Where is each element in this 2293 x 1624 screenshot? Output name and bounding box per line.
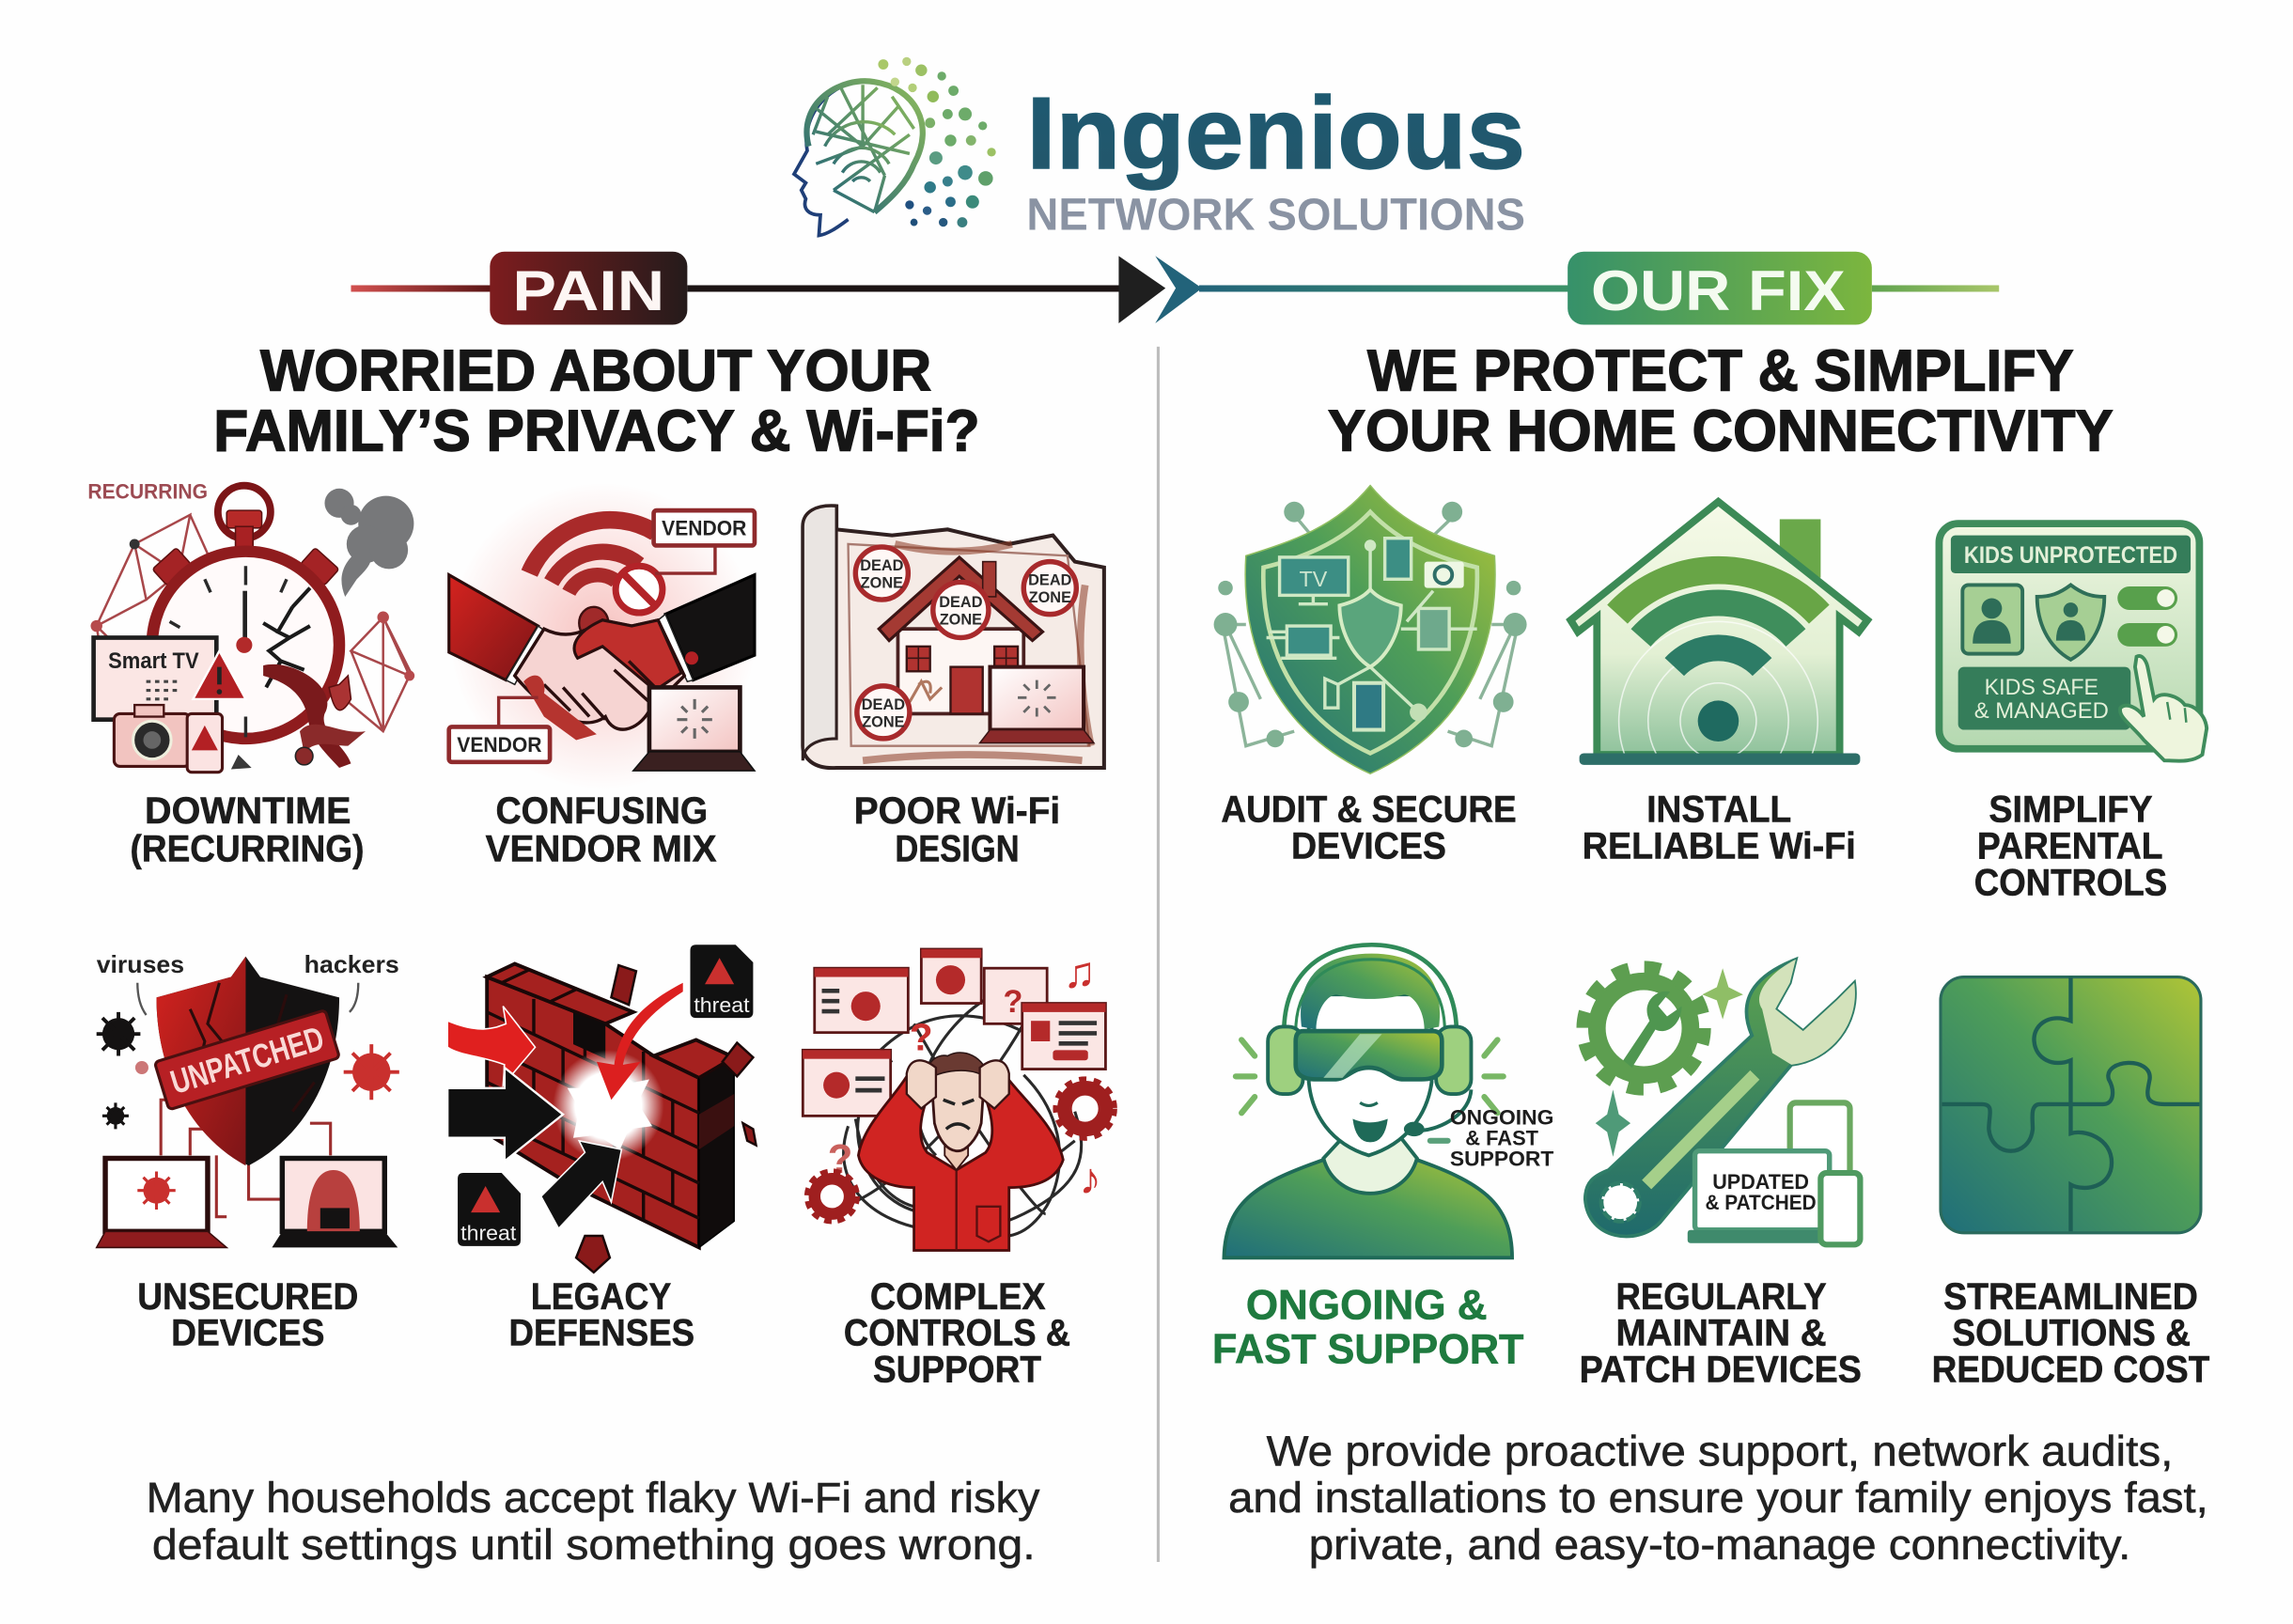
- icon: overwhelmed man with windows: ♫: [1063, 947, 1096, 996]
- label: poor wi-fi design: DESIGN: [895, 829, 1020, 870]
- icon: handshake with vendors: [449, 483, 757, 789]
- fix summary text: and installations to ensure your family enjoys fast,: [1228, 1474, 2208, 1522]
- icon: house with wifi: [1570, 502, 1867, 820]
- item: ongoing and fast support: [1212, 945, 1554, 1372]
- heading: fix: YOUR HOME CONNECTIVITY: [1328, 398, 2114, 463]
- icon: shield with devices: [1214, 486, 1527, 773]
- logo: [794, 57, 1525, 240]
- label: poor wi-fi design: [854, 790, 1060, 870]
- icon: threat tag top: [690, 945, 753, 1018]
- pain badge: [490, 252, 687, 324]
- heading: pain: FAMILY’S PRIVACY & Wi-Fi?: [213, 398, 980, 463]
- pain badge: PAIN: [512, 258, 664, 322]
- icon: parental control panel with hand: KIDS UNPROTECTED: [1964, 542, 2177, 569]
- label: legacy defenses: LEGACY: [531, 1276, 671, 1318]
- pain summary text: default settings until something goes wrong.: [152, 1521, 1036, 1569]
- label: streamlined solutions and reduced cost: STREAMLINED: [1943, 1276, 2198, 1318]
- panel: fix items: [1212, 486, 2209, 1569]
- label: audit and secure devices: [1221, 789, 1517, 867]
- label: confusing vendor mix: VENDOR MIX: [486, 829, 717, 870]
- label: unsecured devices: UNSECURED: [137, 1276, 358, 1318]
- pain summary text: Many households accept flaky Wi-Fi and risky: [147, 1474, 1040, 1522]
- icon: burnt floor plan with dead zones: ZONE: [1029, 589, 1071, 606]
- label: regularly maintain and patch devices: MAINTAIN &: [1616, 1313, 1827, 1354]
- icon: support agent with headset and goggles: ONGOING: [1450, 1106, 1553, 1130]
- label: downtime: DOWNTIME: [145, 790, 351, 832]
- logo subtitle: NETWORK SOLUTIONS: [1026, 189, 1525, 240]
- label: audit and secure devices: AUDIT & SECURE: [1221, 789, 1517, 831]
- logo icon: head with network brain: [794, 57, 996, 236]
- heading: pain: WORRIED ABOUT YOUR: [260, 339, 931, 404]
- fix summary text: We provide proactive support, network audits,: [1267, 1427, 2173, 1475]
- pain summary text: [147, 1474, 1040, 1569]
- icon: threat tag top: threat: [694, 993, 750, 1017]
- icon: broken stopwatch: RECURRING: [87, 480, 208, 504]
- icon: burnt floor plan with dead zones: DEAD: [862, 696, 905, 713]
- icon: burnt floor plan with dead zones: ZONE: [940, 612, 982, 629]
- item: confusing vendor mix: [449, 483, 757, 870]
- icon: overwhelmed man with windows: [803, 947, 1115, 1251]
- pain / fix timeline arrow: [351, 252, 1999, 324]
- label: ongoing and fast support: FAST SUPPORT: [1212, 1326, 1523, 1372]
- label: ongoing and fast support: [1212, 1283, 1523, 1372]
- item: downtime: [87, 480, 414, 870]
- icon: gear, wrench and patched devices: [1583, 960, 1860, 1244]
- label: streamlined solutions and reduced cost: REDUCED COST: [1932, 1350, 2209, 1391]
- label: complex controls and support: COMPLEX: [870, 1276, 1046, 1318]
- label: regularly maintain and patch devices: REGULARLY: [1616, 1276, 1827, 1318]
- label: downtime: (RECURRING): [130, 829, 364, 870]
- arrow: teal chevron: [1155, 256, 1202, 323]
- label: install reliable wi-fi: RELIABLE Wi-Fi: [1583, 825, 1856, 867]
- label: ongoing and fast support: ONGOING &: [1246, 1283, 1488, 1329]
- label: install reliable wi-fi: [1583, 789, 1856, 867]
- label: simplify parental controls: PARENTAL: [1977, 825, 2163, 867]
- label: complex controls and support: CONTROLS &: [844, 1313, 1070, 1354]
- label: simplify parental controls: [1974, 789, 2167, 903]
- label: regularly maintain and patch devices: [1580, 1276, 1862, 1391]
- label: unsecured devices: [137, 1276, 358, 1354]
- arrow: black arrowhead: [1118, 256, 1165, 323]
- icon: handshake with vendors: VENDOR: [662, 517, 746, 540]
- item: regularly maintain and patch devices: [1580, 960, 1862, 1391]
- icon: cracked unpatched shield with laptops: viruses: [97, 952, 184, 978]
- icon: overwhelmed man with windows: ♪: [1079, 1154, 1101, 1203]
- icon: cracked unpatched shield with laptops: [97, 952, 399, 1247]
- icon: overwhelmed man with windows: ?: [1004, 984, 1022, 1020]
- label: confusing vendor mix: [486, 790, 717, 870]
- panel: pain items: [87, 480, 1115, 1569]
- icon: handshake with vendors: VENDOR: [457, 733, 542, 757]
- icon: parental control panel with hand: [1939, 523, 2207, 761]
- heading: fix: WE PROTECT & SIMPLIFY: [1367, 339, 2074, 404]
- label: audit and secure devices: DEVICES: [1291, 825, 1446, 867]
- center divider: [1157, 347, 1160, 1562]
- logo wordmark: Ingenious: [1026, 76, 1525, 191]
- icon: threat tag bottom: [458, 1173, 521, 1246]
- icon: broken stopwatch: Smart TV: [108, 648, 199, 674]
- item: install reliable wi-fi: [1570, 502, 1867, 867]
- item: simplify parental controls: [1939, 523, 2207, 903]
- icon: parental control panel with hand: KIDS SAFE: [1985, 675, 2098, 700]
- label: unsecured devices: DEVICES: [171, 1313, 324, 1354]
- label: poor wi-fi design: POOR Wi-Fi: [854, 790, 1060, 832]
- icon: gear, wrench and patched devices: UPDATED: [1712, 1170, 1809, 1194]
- label: legacy defenses: [509, 1276, 694, 1354]
- item: streamlined solutions and reduced cost: [1932, 977, 2209, 1391]
- fix summary text: [1228, 1427, 2208, 1569]
- item: complex controls and support: [803, 947, 1115, 1391]
- icon: support agent with headset and goggles: SUPPORT: [1450, 1147, 1554, 1170]
- item: audit and secure devices: [1214, 486, 1527, 867]
- item: legacy defenses: [447, 945, 757, 1354]
- icon: burnt floor plan with dead zones: ZONE: [861, 575, 903, 592]
- icon: breached brick wall: [447, 945, 757, 1273]
- label: simplify parental controls: CONTROLS: [1974, 862, 2167, 903]
- icon: burnt floor plan with dead zones: DEAD: [1028, 571, 1072, 588]
- icon: burnt floor plan with dead zones: DEAD: [939, 594, 983, 611]
- icon: support agent with headset and goggles: & FAST: [1465, 1126, 1538, 1149]
- label: install reliable wi-fi: INSTALL: [1646, 789, 1791, 831]
- icon: cracked unpatched shield with laptops: UNPATCHED: [166, 1020, 328, 1101]
- icon: cracked unpatched shield with laptops: hackers: [304, 952, 399, 978]
- icon: overwhelmed man with windows: ?: [828, 1137, 852, 1182]
- icon: support agent with headset and goggles: [1224, 945, 1554, 1257]
- label: downtime: [130, 790, 364, 870]
- label: simplify parental controls: SIMPLIFY: [1989, 789, 2153, 831]
- heading: fix: [1328, 339, 2114, 463]
- label: legacy defenses: DEFENSES: [509, 1313, 694, 1354]
- fix badge: OUR FIX: [1591, 258, 1846, 322]
- heading: pain: [213, 339, 980, 463]
- label: streamlined solutions and reduced cost: [1932, 1276, 2209, 1391]
- icon: burnt floor plan with dead zones: DEAD: [860, 557, 904, 574]
- icon: overwhelmed man with windows: ?: [910, 1015, 933, 1058]
- icon: threat tag bottom: threat: [460, 1222, 517, 1245]
- label: streamlined solutions and reduced cost: SOLUTIONS &: [1952, 1313, 2191, 1354]
- label: regularly maintain and patch devices: PATCH DEVICES: [1580, 1350, 1862, 1391]
- icon: four piece puzzle: [1941, 977, 2201, 1233]
- item: poor wi-fi design: [803, 506, 1104, 870]
- fix summary text: private, and easy-to-manage connectivity.: [1309, 1521, 2130, 1569]
- icon: burnt floor plan with dead zones: ZONE: [862, 713, 905, 730]
- label: complex controls and support: [844, 1276, 1070, 1391]
- icon: burnt floor plan with dead zones: [803, 506, 1104, 768]
- label: complex controls and support: SUPPORT: [873, 1350, 1041, 1391]
- fix badge: [1568, 252, 1872, 324]
- label: confusing vendor mix: CONFUSING: [496, 790, 708, 832]
- icon: parental control panel with hand: & MANAGED: [1974, 698, 2109, 724]
- icon: gear, wrench and patched devices: & PATCHED: [1705, 1191, 1817, 1214]
- icon: shield with devices: TV: [1299, 567, 1328, 591]
- icon: broken stopwatch: [87, 480, 414, 773]
- item: unsecured devices: [97, 952, 399, 1354]
